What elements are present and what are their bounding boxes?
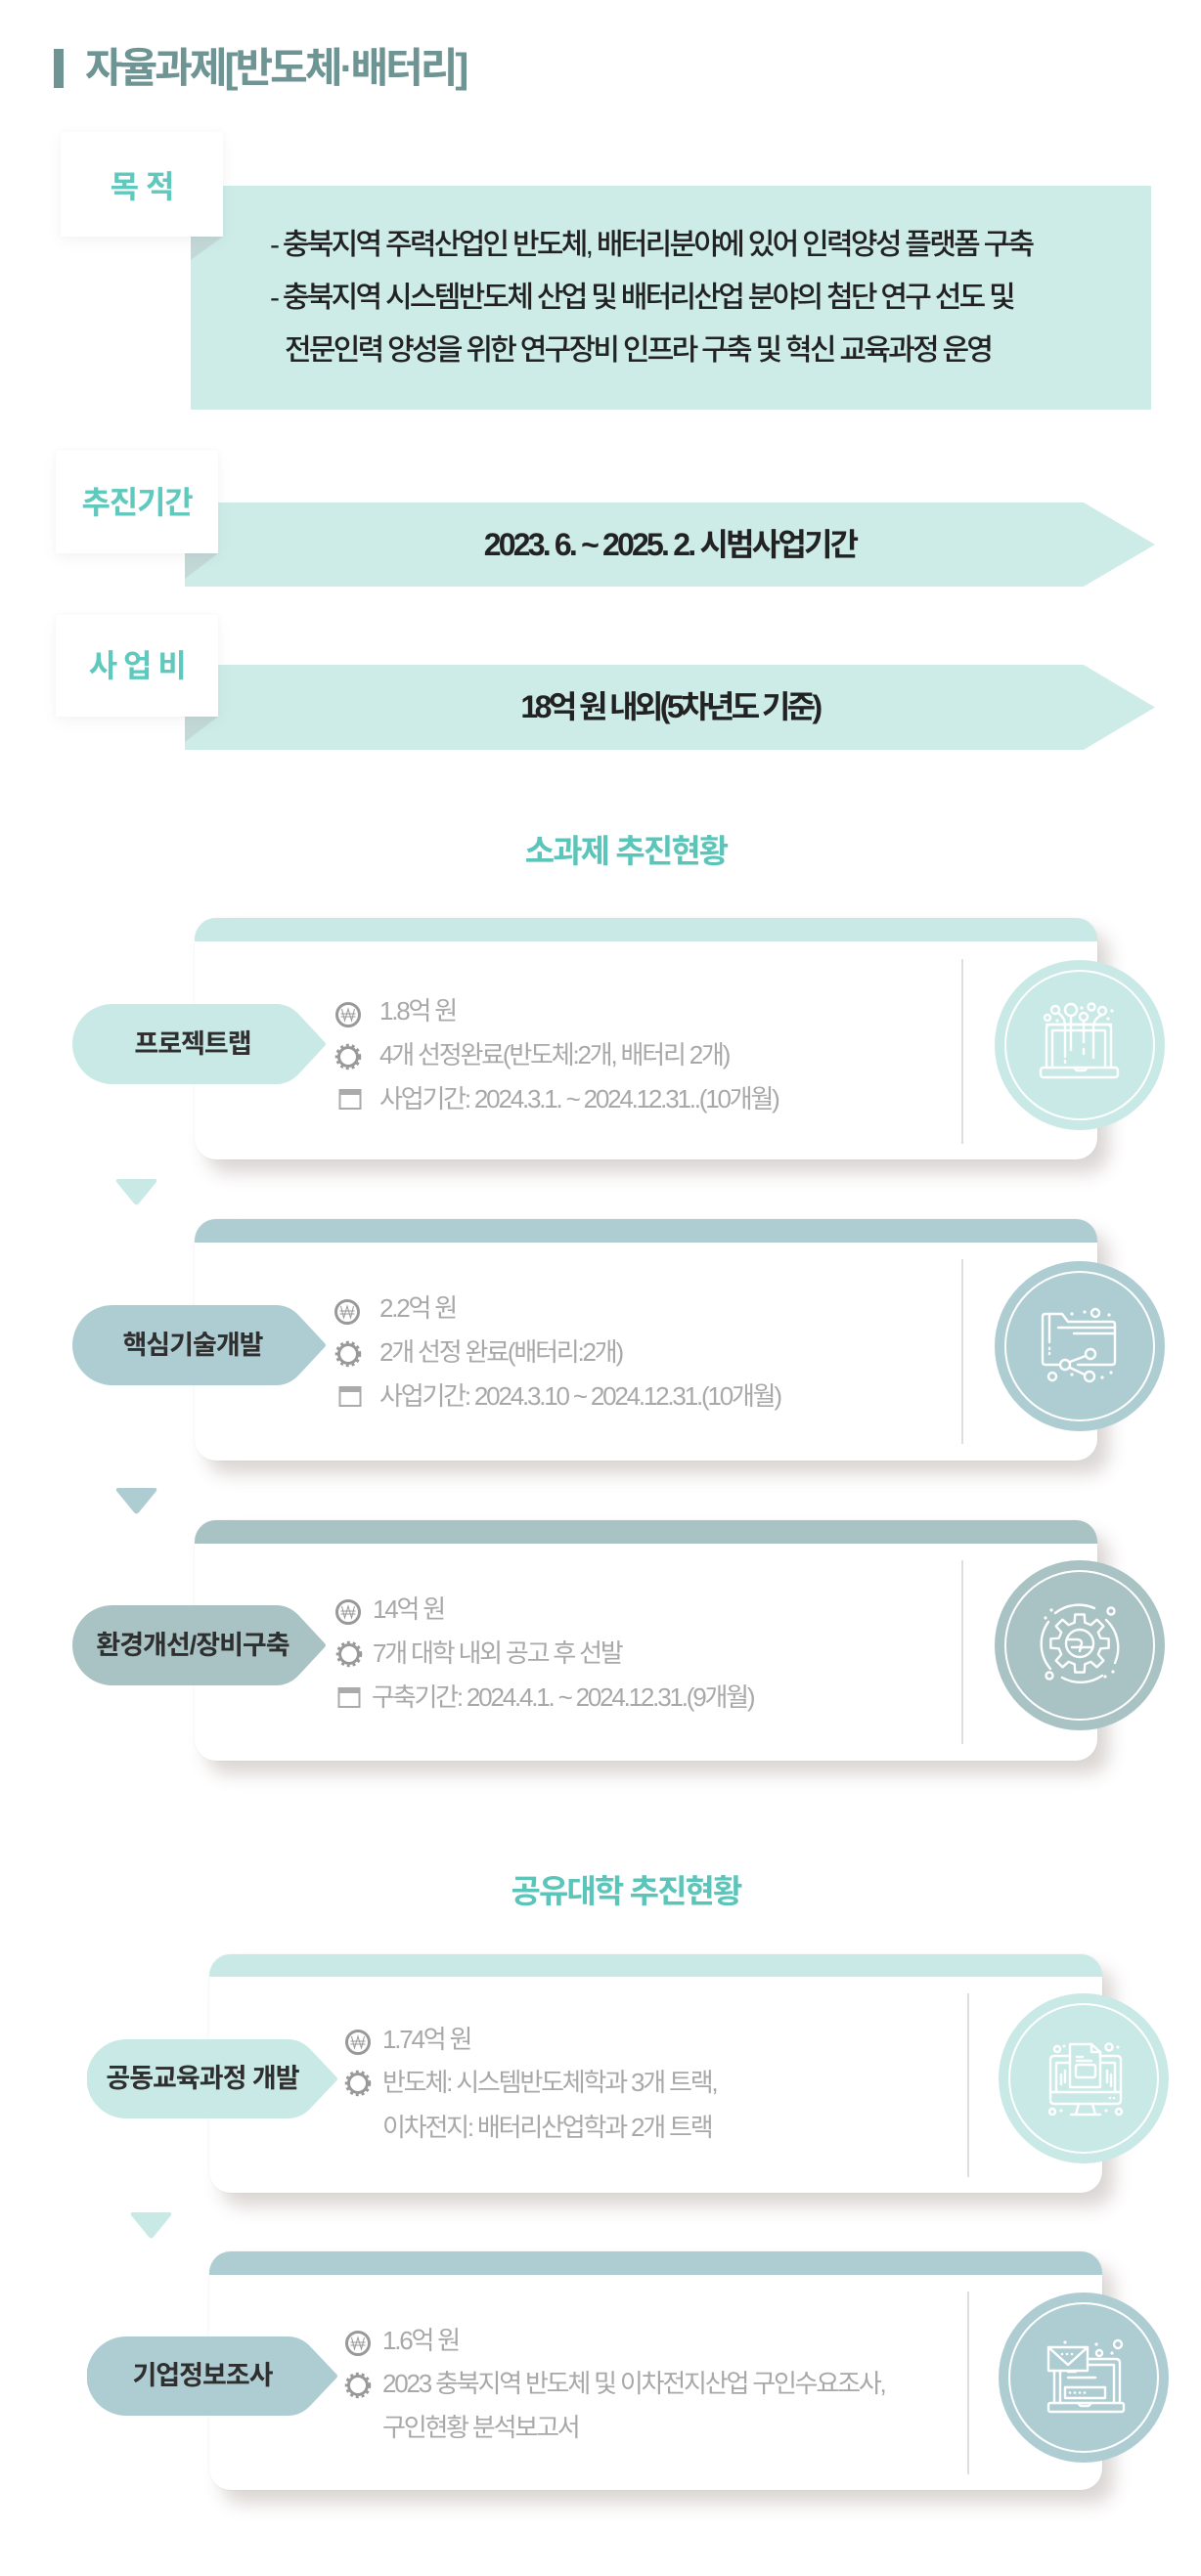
text: selection: 4개 선정완료(반도체:2개, 배터리 2개) <box>379 1040 729 1070</box>
text: budget: 2.2억 원 <box>379 1293 456 1323</box>
text: details: 반도체: 시스템반도체학과 3개 트랙, <box>382 2068 716 2097</box>
pill label: 프로젝트랩 <box>134 1029 251 1059</box>
divider <box>961 1259 963 1444</box>
icon: folder share <box>995 1261 1165 1431</box>
budget tag <box>56 615 218 717</box>
arrow: down 1 <box>115 1179 156 1204</box>
divider <box>967 1993 969 2177</box>
icon: gear globe <box>995 1560 1165 1730</box>
icon: won <box>334 1299 360 1325</box>
divider <box>961 1560 963 1744</box>
pill label <box>87 2336 337 2416</box>
icon: gear <box>344 2071 372 2096</box>
pill label <box>72 1305 326 1385</box>
icon: gear <box>336 1640 362 1668</box>
panel: joint curriculum <box>87 1953 1169 2213</box>
budget tag: 사 업 비 <box>89 648 185 683</box>
icon: won <box>335 1599 361 1625</box>
panel: period <box>65 485 1155 587</box>
purpose text <box>270 229 1034 367</box>
text: budget: 1.74억 원 <box>382 2025 470 2054</box>
period text: 2023. 6. ~ 2025. 2. 시범사업기간 <box>484 527 856 562</box>
text: details <box>382 2369 885 2442</box>
card <box>195 918 1097 1159</box>
title <box>54 45 467 91</box>
purpose tag <box>61 132 223 237</box>
icon: calendar <box>338 1687 360 1708</box>
purpose tag: 목 적 <box>111 169 173 204</box>
panel: core technology <box>72 1218 1165 1482</box>
panel: company information survey <box>87 2250 1169 2511</box>
purpose text: 전문인력 양성을 위한 연구장비 인프라 구축 및 혁신 교육과정 운영 <box>285 334 991 367</box>
text: period: 사업기간: 2024.3.10 ~ 2024.12.31.(10개월) <box>379 1381 780 1411</box>
pill label: 핵심기술개발 <box>122 1331 263 1360</box>
icon: calendar <box>338 1386 362 1407</box>
heading: shared university status: 공유대학 추진현황 <box>512 1873 740 1909</box>
pill label <box>72 1004 326 1084</box>
period arrow <box>185 502 1155 587</box>
icon: gear <box>334 1044 362 1070</box>
pill label <box>72 1605 326 1685</box>
card <box>195 1219 1097 1461</box>
card <box>209 2251 1102 2490</box>
panel: environment improvement <box>72 1519 1165 1781</box>
panel: budget <box>65 648 1155 750</box>
purpose text: - 충북지역 시스템반도체 산업 및 배터리산업 분야의 첨단 연구 선도 및 <box>270 282 1013 314</box>
text: budget: 1.6억 원 <box>382 2326 459 2355</box>
divider <box>961 959 963 1144</box>
text: period: 사업기간: 2024.3.1. ~ 2024.12.31..(10개월) <box>379 1084 778 1113</box>
icon: won <box>345 2331 371 2356</box>
pill label <box>87 2039 337 2118</box>
text: details <box>382 2068 716 2142</box>
icon: monitor document <box>999 1993 1169 2163</box>
title text: 자율과제[반도체·배터리] <box>85 45 466 91</box>
divider <box>967 2292 969 2474</box>
budget arrow <box>185 665 1155 750</box>
icon: laptop circuit <box>995 960 1165 1130</box>
purpose text: - 충북지역 주력산업인 반도체, 배터리분야에 있어 인력양성 플랫폼 구축 <box>270 229 1032 261</box>
text: period: 구축기간: 2024.4.1. ~ 2024.12.31.(9개월) <box>372 1682 753 1712</box>
icon: won <box>335 1002 361 1027</box>
panel: project track <box>72 917 1165 1181</box>
purpose background <box>191 186 1151 410</box>
text: budget: 14억 원 <box>373 1594 444 1624</box>
icon: calendar <box>338 1089 362 1110</box>
text: selection: 7개 대학 내외 공고 후 선발 <box>373 1638 622 1668</box>
arrow: down 2 <box>115 1488 156 1513</box>
panel: purpose <box>69 169 1151 410</box>
text: details: 이차전지: 배터리산업학과 2개 트랙 <box>382 2113 711 2142</box>
icon: gear <box>334 1341 362 1367</box>
icon: gear <box>344 2372 372 2399</box>
period tag: 추진기간 <box>82 485 192 520</box>
pill label: 공동교육과정 개발 <box>106 2064 299 2093</box>
arrow: down 3 <box>131 2212 172 2239</box>
card <box>209 1954 1102 2193</box>
title marker bar <box>54 49 64 88</box>
heading: sub-task status: 소과제 추진현황 <box>525 833 727 869</box>
icon: won <box>345 2030 371 2055</box>
purpose fold <box>191 237 223 260</box>
icon: mail laptop <box>999 2292 1169 2463</box>
text: details: 구인현황 분석보고서 <box>382 2413 579 2442</box>
budget text: 18억 원 내외(5차년도 기준) <box>520 689 820 724</box>
pill label: 기업정보조사 <box>132 2361 273 2390</box>
pill label: 환경개선/장비구축 <box>96 1631 289 1660</box>
text: budget: 1.8억 원 <box>379 996 456 1026</box>
text: details: 2023 충북지역 반도체 및 이차전지산업 구인수요조사, <box>382 2369 885 2398</box>
card <box>195 1520 1097 1761</box>
period tag <box>56 451 218 553</box>
text: selection: 2개 선정 완료(배터리:2개) <box>379 1337 622 1367</box>
